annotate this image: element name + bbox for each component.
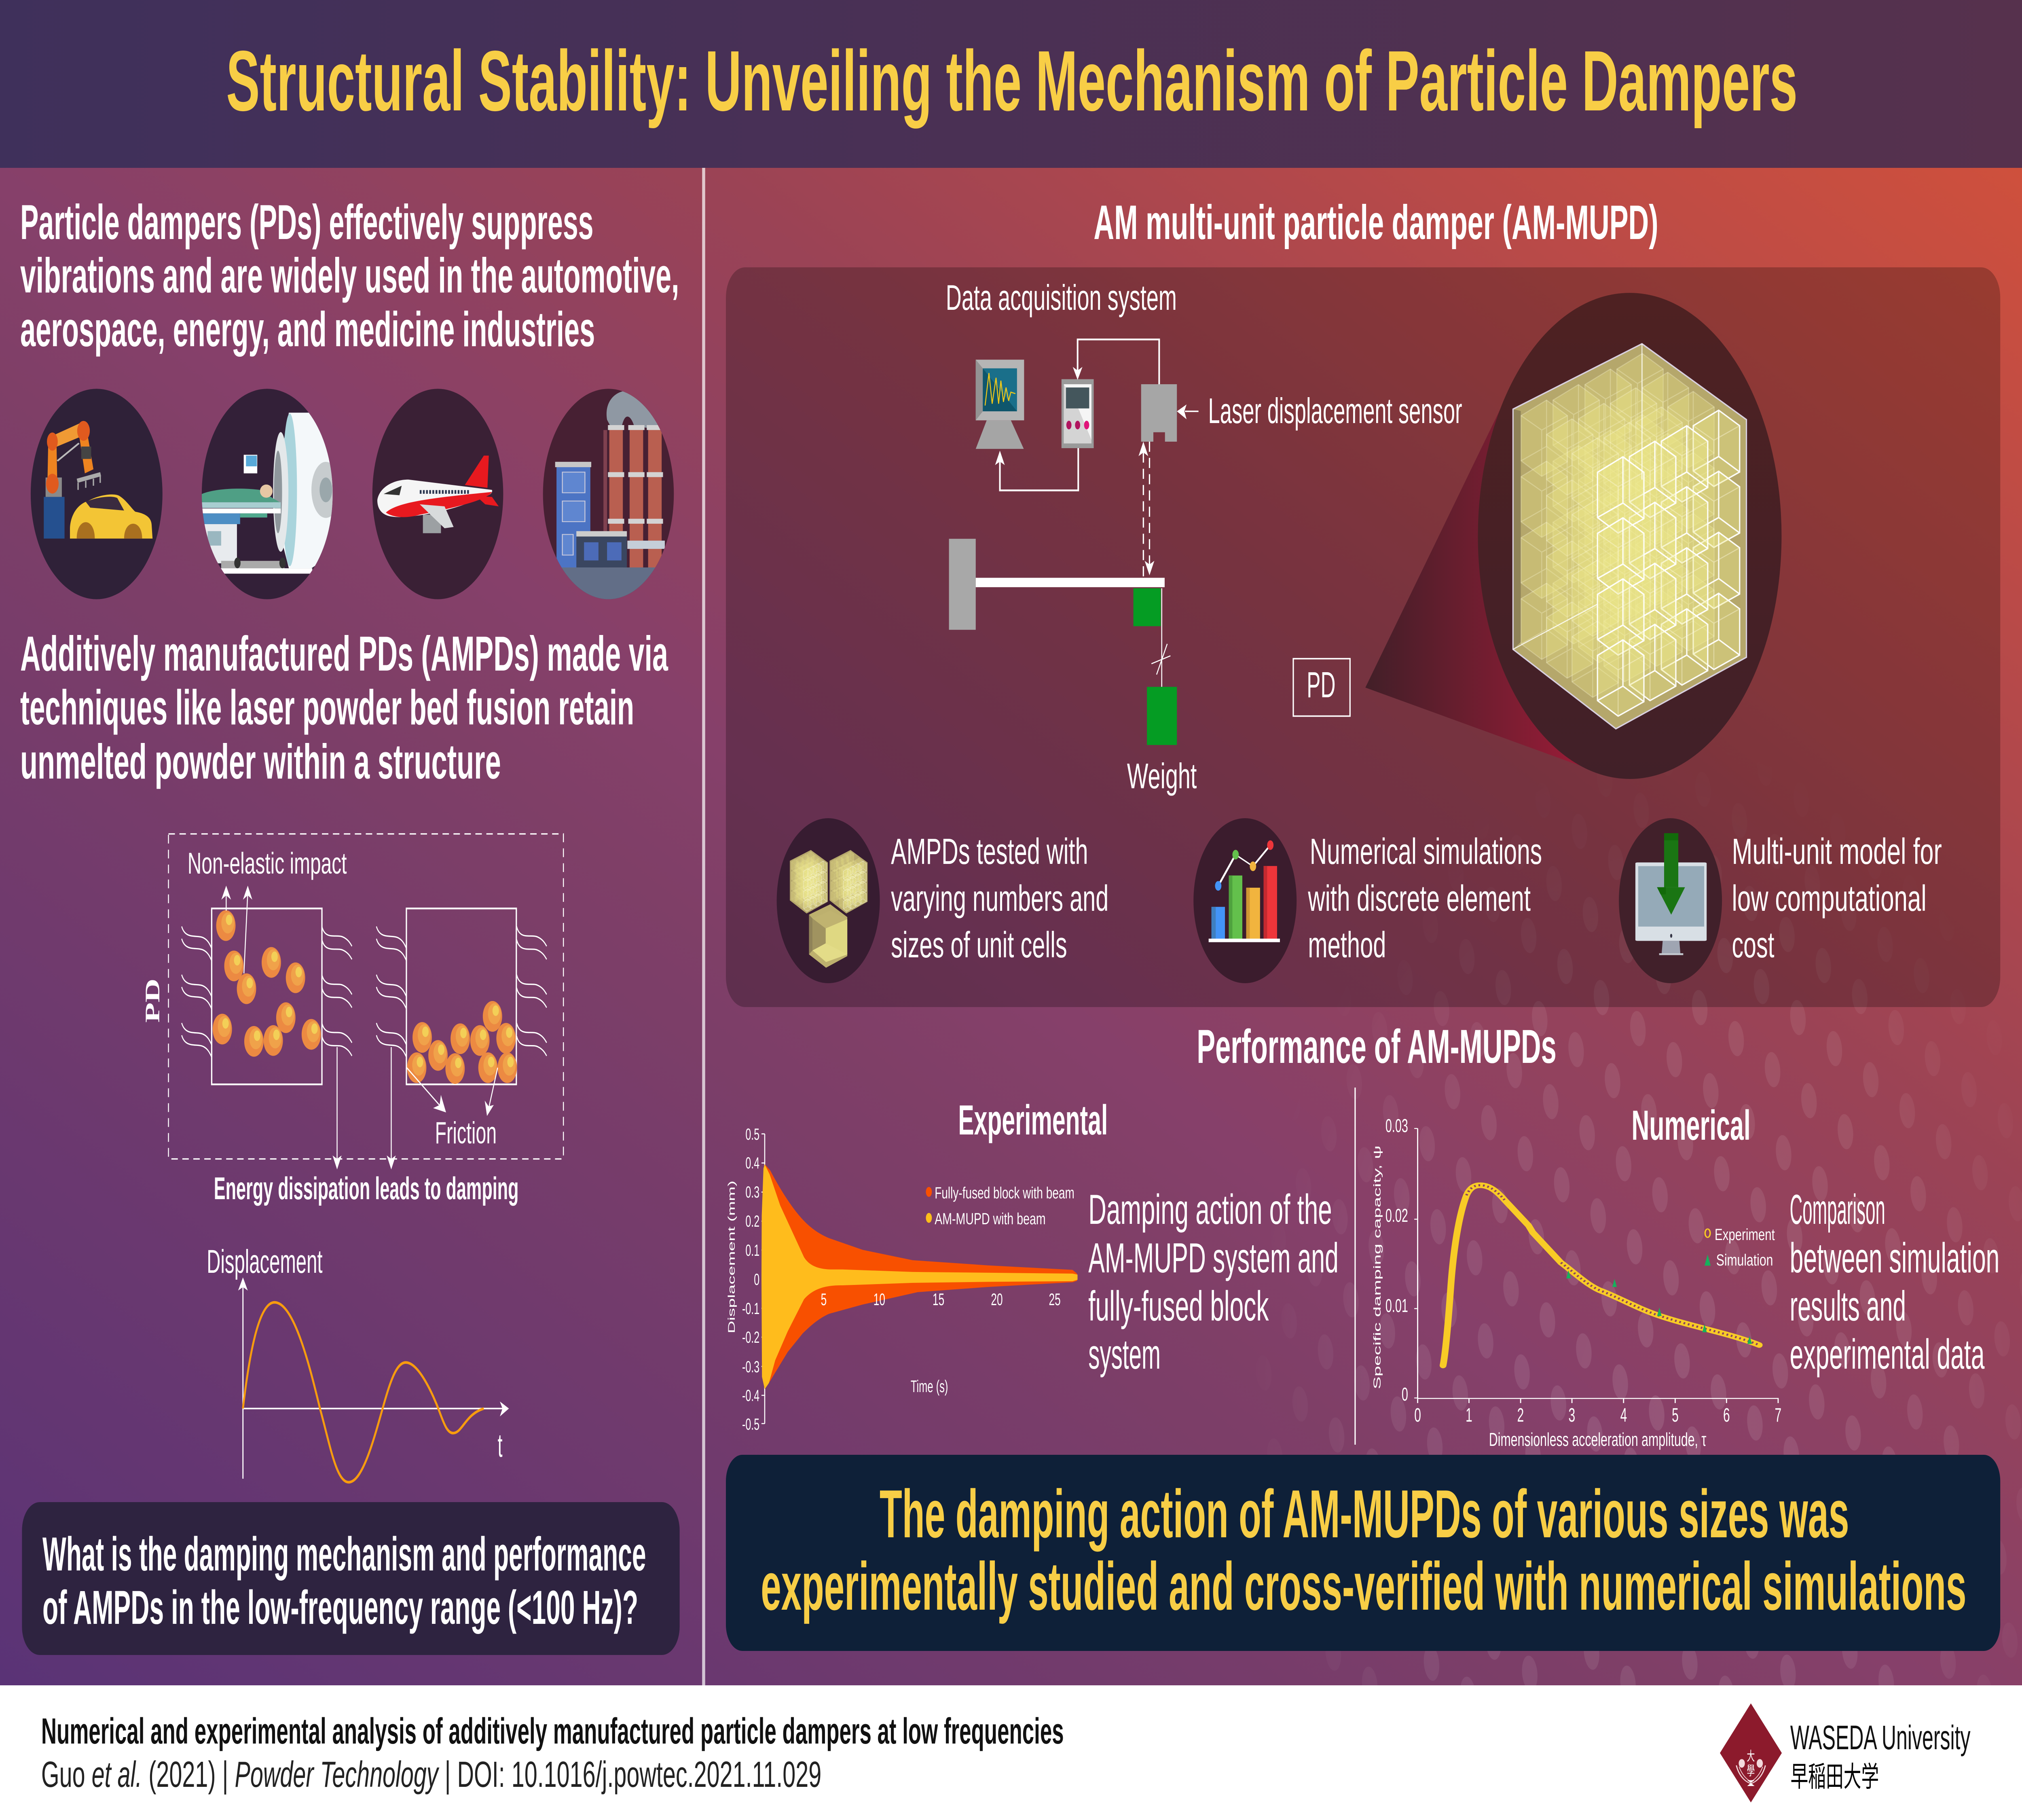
text block: comparison: experimental data xyxy=(1790,1331,1985,1378)
icon: bar chart xyxy=(1209,840,1280,942)
feature: AMPDs tested xyxy=(777,818,1108,983)
logo: Waseda University: WASEDA University xyxy=(1790,1718,1971,1757)
y axis tick labels: 0.3 xyxy=(745,1183,759,1202)
feature: AMPDs tested: AMPDs tested with xyxy=(891,831,1088,872)
panel: experimental results xyxy=(726,1096,1339,1434)
title: Structural Stability: Unveiling the Mechanism of Particle Dampers xyxy=(226,33,1798,129)
text block: damping action: AM-MUPD system and xyxy=(1088,1234,1339,1282)
icon: aerospace airplane xyxy=(372,389,503,599)
subheading: numerical: Numerical xyxy=(1631,1102,1751,1149)
text block: comparison: Comparison xyxy=(1790,1186,1885,1233)
y axis tick labels: -0.1 xyxy=(742,1300,759,1318)
x axis tick labels xyxy=(821,1290,1061,1309)
text block: additively manufactured PDs xyxy=(20,626,668,789)
icon: data acquisition unit xyxy=(1062,379,1094,448)
icon row: industries xyxy=(31,389,674,601)
callout: research question: What is the damping mechanism and performance xyxy=(42,1527,646,1581)
x axis tick labels: 2 xyxy=(1517,1405,1524,1426)
feature: numerical simulations: method xyxy=(1308,924,1386,965)
chart: specific damping capacity xyxy=(1372,1115,1781,1450)
feature: multi-unit model xyxy=(1619,818,1942,983)
experiment curve xyxy=(1443,1185,1759,1365)
label: laser sensor: Laser displacement sensor xyxy=(1208,391,1462,431)
y axis tick labels: 0.02 xyxy=(1385,1205,1408,1226)
figure: magnified multi-unit damper xyxy=(1365,293,1781,779)
feature: multi-unit model: Multi-unit model for xyxy=(1732,831,1942,872)
diagram: test setup xyxy=(946,278,1462,796)
x axis tick labels: 15 xyxy=(933,1290,944,1309)
y axis tick labels: -0.2 xyxy=(742,1329,759,1347)
chart: displacement decay sketch: Displacement xyxy=(207,1243,323,1280)
logo: Waseda University: 大 xyxy=(1747,1749,1755,1763)
y axis tick labels: 0.2 xyxy=(745,1213,759,1231)
y axis tick labels: -0.4 xyxy=(742,1387,759,1405)
y axis tick labels: 0.03 xyxy=(1385,1115,1408,1136)
text block: comparison: results and xyxy=(1790,1282,1906,1330)
beam and clamp xyxy=(949,539,1177,745)
simulation markers xyxy=(1566,1255,1752,1344)
citation reference: Guo et al. (2021) | Powder Technology | DOI: 10.1016/j.powtec.2021.11.029 xyxy=(41,1754,821,1795)
label: PD: PD xyxy=(141,978,164,1023)
chart: displacement vs time xyxy=(726,1126,1078,1434)
label: energy dissipation: Energy dissipation leads to damping xyxy=(214,1170,518,1206)
y axis tick labels: 0.5 xyxy=(745,1126,759,1144)
header band xyxy=(0,0,2022,168)
x axis tick labels: 1 xyxy=(1466,1405,1472,1426)
x axis tick labels: 0 xyxy=(1414,1405,1421,1426)
text block: additively manufactured PDs: Additively manufactured PDs (AMPDs) made via xyxy=(20,626,668,681)
label: data acquisition: Data acquisition system xyxy=(946,278,1177,317)
text block: particle dampers: Particle dampers (PDs) effectively suppress xyxy=(20,195,594,250)
icon: computer monitor xyxy=(976,360,1024,449)
logo: Waseda University xyxy=(1720,1704,1970,1803)
x axis tick labels: 3 xyxy=(1569,1405,1575,1426)
icon: monitor with download arrow xyxy=(1635,833,1707,955)
legend: Simulation xyxy=(1716,1251,1773,1270)
vertical divider xyxy=(702,168,705,1685)
y axis tick labels: -0.3 xyxy=(742,1358,759,1376)
y axis tick labels: 0 xyxy=(1402,1384,1408,1405)
x axis tick labels: 5 xyxy=(1672,1405,1679,1426)
text block: damping action: fully-fused block xyxy=(1088,1282,1269,1330)
icon: laser sensor xyxy=(1141,384,1177,442)
panel: numerical results xyxy=(1372,1102,1999,1450)
label: friction: Friction xyxy=(435,1116,497,1150)
diagram: particle damper mechanism xyxy=(141,834,563,1206)
x axis tick labels: 25 xyxy=(1049,1290,1061,1309)
legend: AM-MUPD with beam xyxy=(935,1210,1046,1228)
y axis tick labels: -0.5 xyxy=(742,1416,759,1434)
legend xyxy=(1715,1226,1775,1270)
left enclosure with flying particles xyxy=(182,886,352,1084)
x axis title: Time (s) xyxy=(911,1377,948,1396)
heading: AM-MUPD: AM multi-unit particle damper (AM-MUPD) xyxy=(1093,195,1658,250)
feature: multi-unit model: cost xyxy=(1732,924,1775,965)
feature: numerical simulations: with discrete element xyxy=(1308,878,1531,918)
legend xyxy=(935,1184,1074,1228)
callout: research question: of AMPDs in the low-frequency range (<100 Hz)? xyxy=(42,1581,638,1634)
callout: conclusion xyxy=(726,1455,2000,1651)
right enclosure with settled particles xyxy=(376,908,547,1116)
label: non-elastic impact: Non-elastic impact xyxy=(188,847,347,880)
logo: Waseda University: 早稲田大学 xyxy=(1791,1761,1879,1793)
divider between charts xyxy=(1354,1088,1356,1445)
text block: particle dampers xyxy=(20,195,679,357)
x axis tick labels: 7 xyxy=(1775,1405,1781,1426)
text block: comparison xyxy=(1790,1186,1999,1378)
chart: displacement decay sketch: t xyxy=(498,1427,503,1464)
x axis tick labels: 6 xyxy=(1723,1405,1730,1426)
panel: AM-MUPD setup xyxy=(726,267,2000,1007)
feature: AMPDs tested: varying numbers and xyxy=(891,878,1108,918)
x axis title: Dimensionless acceleration amplitude, τ xyxy=(1489,1429,1706,1450)
panel: left introduction xyxy=(20,195,680,1655)
y axis tick labels: 0.01 xyxy=(1385,1295,1408,1316)
label: weight: Weight xyxy=(1127,756,1197,796)
icon: three lattice cubes xyxy=(790,850,867,968)
callout: conclusion: The damping action of AM-MUPDs of various sizes was xyxy=(880,1476,1849,1552)
x axis tick labels: 20 xyxy=(991,1290,1003,1309)
feature: numerical simulations: Numerical simulations xyxy=(1310,831,1542,872)
text block: additively manufactured PDs: unmelted powder within a structure xyxy=(20,734,501,789)
text block: particle dampers: aerospace, energy, and medicine industries xyxy=(20,302,595,357)
y axis tick labels: 0.1 xyxy=(745,1242,759,1260)
legend: Experiment xyxy=(1715,1226,1775,1244)
feature: AMPDs tested: sizes of unit cells xyxy=(891,924,1067,965)
logo: Waseda University: 學 xyxy=(1747,1763,1755,1778)
chart: displacement decay sketch xyxy=(207,1243,509,1482)
y axis tick labels: 0.4 xyxy=(745,1154,759,1172)
x axis tick labels: 10 xyxy=(874,1290,885,1309)
y axis tick labels: 0 xyxy=(754,1271,759,1289)
x axis tick labels: 4 xyxy=(1620,1405,1627,1426)
text block: damping action: system xyxy=(1088,1331,1161,1378)
icon: automotive robot and car xyxy=(31,389,163,599)
legend: Fully-fused block with beam xyxy=(935,1184,1074,1202)
label: PD: PD xyxy=(1307,664,1336,705)
citation title: Numerical and experimental analysis of additively manufactured particle dampers at low frequencies xyxy=(41,1710,1064,1751)
subheading: experimental: Experimental xyxy=(958,1096,1108,1144)
callout cone xyxy=(1365,395,1580,766)
icon: medical MRI scanner xyxy=(202,389,341,599)
text block: particle dampers: vibrations and are widely used in the automotive, xyxy=(20,248,679,303)
lattice cube xyxy=(1513,344,1747,729)
feature: multi-unit model: low computational xyxy=(1732,878,1927,918)
footer xyxy=(0,1685,2022,1820)
heading: performance: Performance of AM-MUPDs xyxy=(1197,1020,1557,1073)
y axis title: Displacement (mm) xyxy=(726,1181,737,1333)
text block: comparison: between simulation xyxy=(1790,1234,1999,1282)
y axis title: Specific damping capacity, ψ xyxy=(1372,1145,1383,1389)
y axis tick labels xyxy=(1385,1115,1408,1405)
feature: numerical simulations xyxy=(1193,818,1542,983)
x axis tick labels: 5 xyxy=(821,1290,827,1309)
text block: damping action xyxy=(1088,1186,1339,1378)
callout: research question xyxy=(22,1502,680,1655)
y axis tick labels xyxy=(742,1126,759,1434)
text block: damping action: Damping action of the xyxy=(1088,1186,1332,1233)
icon: energy factory xyxy=(543,389,674,601)
x axis tick labels xyxy=(1414,1405,1781,1426)
text block: additively manufactured PDs: techniques like laser powder bed fusion retain xyxy=(20,680,634,735)
